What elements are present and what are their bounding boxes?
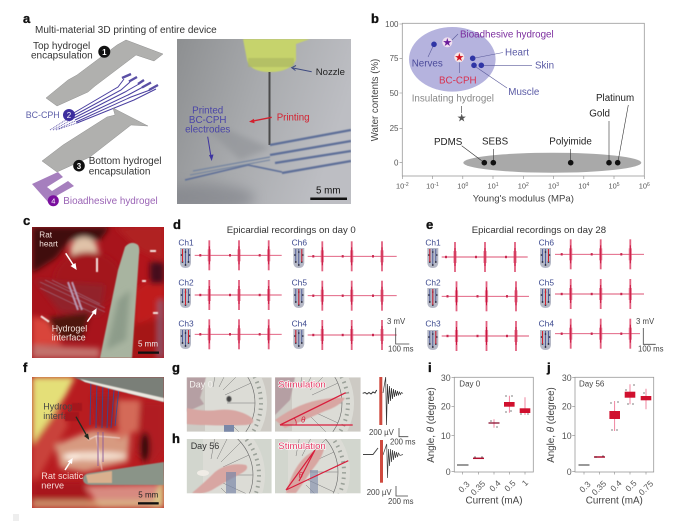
point labels: Heart — [505, 47, 529, 58]
arrow to heart — [66, 253, 77, 270]
scale bar: 5 mm — [316, 185, 340, 196]
photo: day 56 stimulation: Stimulation — [278, 441, 326, 452]
box plots — [457, 395, 530, 465]
channel labels: Ch4 — [292, 319, 307, 329]
photo: day 56 rest: Day 56 — [191, 441, 219, 451]
panel e heading: Epicardial recordings on day 28 — [472, 225, 606, 236]
arrow to interface — [87, 308, 97, 322]
BC-CPH label: BC-CPH — [26, 110, 60, 120]
panel f: sciatic nerve photo — [23, 360, 164, 508]
y tick labels: 30 — [441, 373, 451, 383]
x tick labels: 3 — [556, 182, 559, 188]
hydrogel electrodes — [40, 280, 105, 314]
y tick labels: 10 — [441, 431, 451, 441]
x axis title: Young's modulus (MPa) — [473, 194, 574, 205]
photo — [32, 227, 164, 358]
lower spatula — [83, 462, 164, 485]
blood blots over label — [65, 403, 82, 421]
channel labels: Ch1 — [425, 238, 441, 248]
rat heart label: Rat — [39, 230, 53, 239]
x tick labels: 0 — [466, 182, 469, 188]
printed electrodes label and arrow: Printed — [192, 105, 223, 116]
y axis title: Angle, θ (degree) — [426, 387, 437, 463]
hydrogel interface label: interface — [43, 411, 78, 421]
evoked waveform — [363, 444, 403, 478]
x tick labels: 10 — [548, 181, 556, 190]
nozzle label and arrow: Nozzle — [316, 67, 345, 78]
panel i: box plot day 0 — [426, 360, 533, 506]
day label: Day 56 — [579, 380, 605, 389]
panel letter g: g — [172, 360, 180, 375]
x tick labels: 10 — [518, 181, 526, 190]
x tick labels: 0.5 — [502, 478, 518, 494]
syringe — [243, 39, 310, 72]
scale bar: 200 µV — [367, 488, 392, 497]
nozzle label and arrow — [290, 65, 344, 75]
x tick labels: 10 — [639, 181, 647, 190]
ticks — [400, 24, 644, 179]
point labels: BC-CPH — [439, 75, 477, 86]
star markers: ★ — [457, 112, 467, 124]
bioadhesive hydrogel layer — [32, 172, 74, 202]
panel letter b: b — [371, 11, 379, 26]
badge 1 — [98, 46, 110, 58]
channel labels: Ch5 — [292, 278, 307, 288]
panel e: recordings day 28 — [425, 217, 664, 354]
scale bar: 5 mm — [138, 490, 159, 499]
y ticks — [452, 377, 525, 474]
photo: day 0 stimulation: θ — [301, 416, 306, 424]
point labels: Nerves — [412, 59, 443, 70]
scale bar — [310, 185, 347, 200]
point labels — [412, 29, 634, 148]
x tick labels — [396, 181, 650, 190]
x tick labels — [456, 477, 530, 497]
y tick labels: 75 — [390, 54, 399, 63]
electrode icons — [427, 248, 551, 350]
channel labels: Ch4 — [539, 319, 554, 329]
x tick labels: 2 — [526, 182, 529, 188]
box plots — [578, 384, 651, 465]
leader lines — [428, 34, 532, 88]
top hydrogel label: encapsulation — [31, 51, 93, 62]
photo: day 0 rest — [186, 377, 272, 432]
panel d: recordings day 0 — [173, 217, 414, 354]
x tick labels: 10 — [426, 181, 434, 190]
x tick labels: 0.3 — [577, 479, 593, 495]
point labels: Bioadhesive hydrogel — [460, 29, 554, 40]
photo: day 56 stimulation: θ — [298, 471, 304, 480]
needle — [268, 72, 270, 145]
x tick labels: 0.35 — [468, 478, 487, 497]
printed electrodes label and arrow: electrodes — [185, 125, 230, 136]
y tick labels: 50 — [390, 89, 399, 98]
top hydrogel layer — [46, 40, 163, 106]
x tick labels: -1 — [434, 182, 439, 188]
scale bar — [138, 340, 159, 354]
x tick labels: 0.5 — [623, 478, 639, 494]
y ticks — [572, 377, 646, 474]
panel letter e: e — [426, 217, 433, 232]
badge 1: 1 — [102, 48, 107, 57]
tissue points — [431, 42, 484, 68]
y axis title: Angle, θ (degree) — [546, 387, 557, 463]
y tick labels: 10 — [562, 431, 572, 441]
x tick labels: 10 — [396, 181, 404, 190]
photo: day 56 rest — [186, 439, 272, 494]
panel letter c: c — [23, 213, 30, 228]
spatula — [100, 243, 139, 358]
panel letter i: i — [428, 360, 432, 375]
scale bar: 5 mm — [138, 340, 158, 349]
y tick labels: 0 — [567, 467, 572, 477]
y tick labels: 20 — [441, 402, 451, 412]
badge 3: 3 — [77, 162, 82, 171]
upper metal retractor — [73, 377, 164, 402]
scale bar: 100 ms — [388, 345, 414, 354]
channel labels: Ch6 — [292, 238, 307, 248]
y tick labels: 100 — [385, 20, 399, 29]
scale bar: 3 mV — [636, 317, 655, 326]
channel labels: Ch5 — [539, 278, 554, 288]
panel j: box plot day 56 — [546, 360, 655, 506]
bottom hydrogel label: Bottom hydrogel — [89, 156, 162, 167]
photo: day 0 stimulation: Stimulation — [278, 379, 326, 390]
y tick labels: 0 — [446, 467, 451, 477]
x tick labels — [577, 478, 655, 497]
scale bar: 200 ms — [388, 497, 414, 506]
y tick labels: 0 — [394, 158, 399, 168]
badge 4 — [48, 195, 59, 206]
channel labels: Ch2 — [178, 278, 194, 288]
channel labels: Ch6 — [539, 238, 554, 248]
panel letter f: f — [23, 360, 28, 375]
plot frame — [575, 377, 654, 472]
x tick labels: 10 — [578, 181, 587, 190]
channel labels: Ch3 — [178, 319, 194, 329]
scale bar: 200 ms — [390, 437, 416, 446]
panel h: day 56 stimulation — [172, 433, 414, 504]
printing label and arrow: Printing — [277, 113, 310, 124]
bottom hydrogel label: encapsulation — [89, 166, 150, 177]
stimulation artifact bar — [380, 440, 383, 483]
point labels: SEBS — [482, 136, 509, 148]
bottom hydrogel layer — [42, 108, 148, 172]
channel labels: Ch2 — [425, 278, 441, 288]
panel c: rat heart photo — [23, 213, 164, 358]
printed leads — [90, 378, 120, 428]
y tick labels: 30 — [562, 373, 572, 383]
plot frame — [402, 23, 644, 176]
BC-CPH electrode layer — [50, 74, 158, 130]
stimulation artifact bar — [379, 377, 382, 425]
arrow to nerve — [65, 458, 73, 470]
point labels: Muscle — [508, 87, 540, 98]
scale bar: 3 mV — [387, 317, 406, 326]
scale bar — [387, 317, 414, 354]
panel g: day 0 stimulation — [172, 364, 416, 444]
point labels: Skin — [535, 60, 554, 71]
x tick labels: 1 — [496, 182, 499, 188]
panel letter a: a — [23, 11, 31, 26]
bioadhesive label: Bioadhesive hydrogel — [63, 196, 158, 207]
x axis title: Current (mA) — [465, 495, 523, 506]
scale bar — [636, 317, 664, 354]
scale bar — [369, 428, 416, 446]
channel labels — [425, 238, 554, 329]
x tick labels: 10 — [608, 181, 617, 190]
point labels: PDMS — [434, 137, 463, 148]
printed electrodes label and arrow: BC-CPH — [189, 115, 226, 126]
metals and polymers ellipse — [463, 153, 641, 173]
y tick labels — [562, 373, 572, 477]
top hydrogel label: Top hydrogel — [33, 41, 90, 52]
day label: Day 0 — [459, 380, 481, 389]
scale bar — [138, 490, 159, 504]
hydrogel interface label: Hydrogel — [52, 324, 87, 334]
traces left column — [442, 242, 529, 351]
scale bar: 100 ms — [638, 345, 664, 354]
star markers: ★ — [454, 52, 464, 64]
arrow to interface — [76, 417, 89, 440]
plot frame — [454, 377, 533, 472]
x tick labels: -2 — [404, 182, 409, 188]
x tick labels: 1 — [520, 477, 530, 488]
x tick labels: 6 — [647, 182, 650, 188]
x axis title: Current (mA) — [586, 495, 643, 506]
star markers: ★ — [442, 37, 452, 49]
channel labels — [178, 238, 307, 329]
point labels: Insulating hydrogel — [412, 94, 494, 105]
rat sciatic nerve label: nerve — [41, 480, 64, 490]
channel labels: Ch3 — [425, 319, 441, 329]
tissue ellipse — [409, 27, 496, 92]
badge 4: 4 — [51, 197, 55, 206]
highlight specks — [40, 250, 158, 323]
panel a: device schematic — [23, 11, 217, 207]
photo: day 0 rest: Day 0 — [189, 380, 213, 390]
printed electrodes label and arrow — [185, 105, 230, 161]
point labels: Platinum — [596, 93, 634, 104]
point labels: Gold — [589, 109, 610, 120]
rat heart label: heart — [39, 240, 59, 249]
photo: day 56 stimulation — [275, 439, 360, 494]
hydrogel interface label: interface — [52, 333, 86, 343]
star markers — [442, 37, 467, 124]
evoked waveform — [363, 377, 403, 425]
traces right column — [555, 239, 644, 349]
panel letter d: d — [173, 217, 181, 232]
x tick labels: 5 — [617, 182, 620, 188]
x tick labels: 4 — [587, 182, 590, 188]
black leader lines — [462, 105, 628, 161]
printed electrodes — [185, 130, 351, 180]
x tick labels: 0.3 — [456, 479, 472, 495]
photo: day 0 stimulation — [275, 377, 361, 432]
material points — [482, 160, 620, 166]
x tick labels: 0.4 — [487, 478, 503, 494]
panel b: water content chart — [370, 11, 650, 205]
traces left column — [195, 240, 282, 349]
panel d heading: Epicardial recordings on day 0 — [227, 225, 356, 236]
hydrogel interface label: Hydrogel — [43, 401, 79, 411]
y tick labels: 20 — [562, 402, 572, 412]
traces right column — [308, 241, 397, 350]
x tick labels: 10 — [487, 181, 496, 190]
x tick labels: 0.75 — [636, 478, 655, 497]
y tick labels — [385, 20, 399, 168]
x tick labels: 0.4 — [608, 478, 624, 494]
rat sciatic nerve label: Rat sciatic — [41, 471, 84, 481]
scale bar — [367, 486, 414, 506]
panel a heading: Multi-material 3D printing of entire device — [35, 25, 217, 36]
badge 2: 2 — [67, 111, 72, 120]
badge 3 — [73, 160, 85, 172]
panel letter j: j — [546, 360, 551, 375]
electrode icons — [180, 248, 304, 349]
x tick labels: 0.35 — [589, 478, 608, 497]
printing label and arrow — [249, 113, 310, 124]
panel a: printing photo — [177, 39, 351, 204]
y tick labels — [441, 373, 451, 477]
point labels: Polyimide — [549, 137, 592, 148]
x tick labels: 10 — [457, 181, 466, 190]
photo — [32, 377, 164, 508]
channel labels: Ch1 — [178, 238, 194, 248]
panel letter h: h — [172, 431, 180, 446]
scale bar: 200 µV — [369, 428, 395, 437]
badge 2 — [63, 109, 75, 121]
y axis title: Water contents (%) — [370, 59, 381, 141]
y tick labels: 25 — [390, 124, 399, 133]
